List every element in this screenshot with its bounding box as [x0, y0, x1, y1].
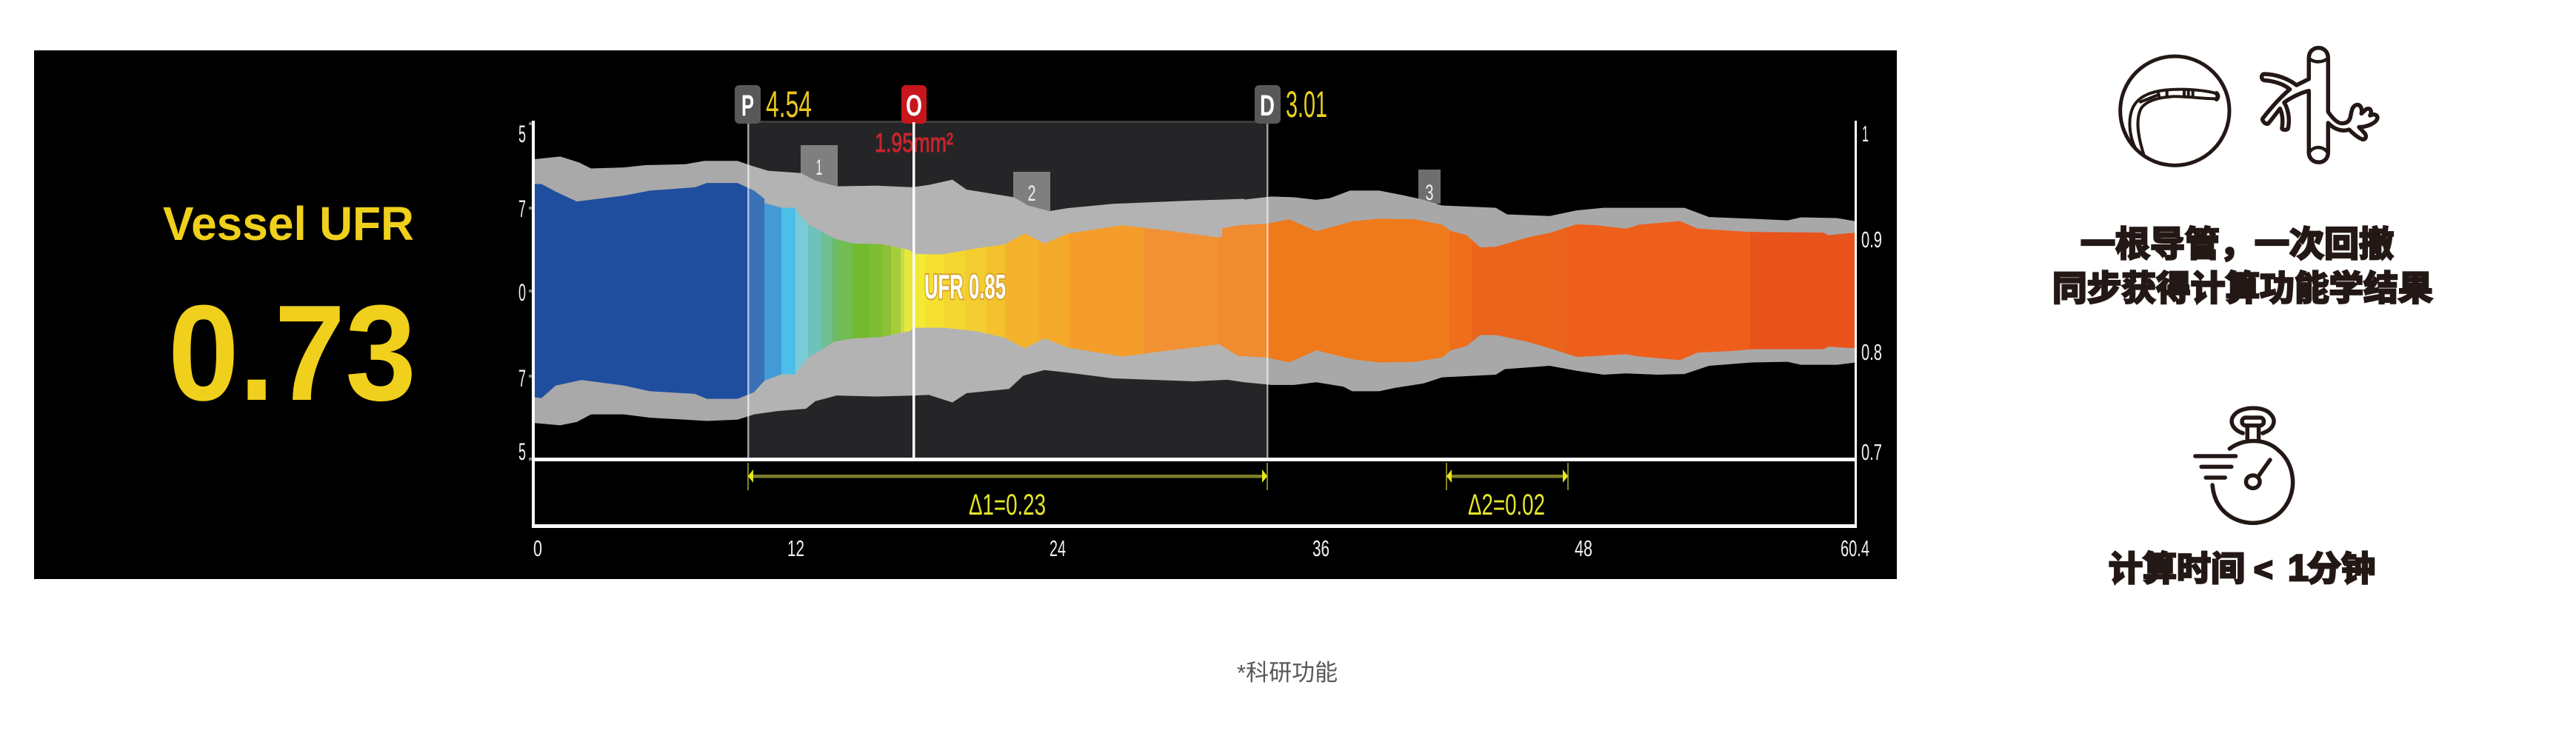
line: P position: [747, 122, 750, 458]
icon: catheter in circle: [2120, 56, 2229, 165]
badge: O: [901, 85, 927, 124]
x axis labels: 24: [1050, 535, 1066, 561]
text: computation time under 1 minute: 分钟: [2307, 549, 2375, 588]
marker: lesion 3: 3: [1425, 181, 1434, 205]
value: 0.73: 0.73: [168, 276, 416, 429]
x axis labels: 0: [533, 535, 542, 561]
footnote: *科研功能: [1237, 660, 1338, 686]
heading: Vessel UFR: Vessel UFR: [163, 197, 414, 250]
text: computation time under 1 minute: 1: [2288, 547, 2309, 589]
badge: P: P: [741, 90, 754, 122]
text: one catheter, one pullback: 一根导管，一次回撤: [2081, 224, 2394, 264]
marker: lesion 2: 2: [1028, 181, 1035, 206]
x axis labels: [533, 535, 1869, 561]
badge: D: [1255, 85, 1281, 124]
right axis labels: 0.9: [1861, 227, 1882, 253]
x axis labels: 48: [1575, 535, 1592, 561]
badge: O: O: [906, 90, 922, 122]
line: O position: [912, 122, 915, 458]
right axis labels: [1861, 121, 1882, 465]
label: delta 2: Δ2=0.02: [1468, 489, 1545, 521]
icon: coronary vessel tree: [2262, 48, 2378, 162]
text: simultaneous functional results: 同步获得计算功能学结果: [2052, 270, 2433, 308]
left axis labels: [518, 121, 532, 465]
left axis labels: 7: [518, 195, 526, 222]
arrow: delta 1 span: [747, 463, 1268, 490]
x axis labels: 12: [787, 535, 804, 561]
left axis labels: 7: [518, 365, 526, 392]
left axis labels: 5: [518, 438, 526, 465]
chart axes frame: [532, 121, 1857, 528]
marker: lesion 2: [1013, 172, 1050, 211]
marker: lesion 1: [801, 145, 838, 187]
badge: P: [735, 85, 761, 124]
shaded P to D segment: [748, 121, 1267, 458]
value: minimum area: 1.95mm²: [875, 127, 953, 158]
left axis labels: 0: [518, 279, 526, 306]
right axis labels: 1: [1862, 121, 1869, 147]
text: computation time under 1 minute: 计算时间: [2109, 549, 2245, 588]
value: P 4.54: 4.54: [766, 84, 812, 125]
marker: lesion 3: [1418, 170, 1441, 205]
lumen colour bands: [535, 183, 1855, 399]
arrow: delta 2 span: [1446, 463, 1569, 490]
text: computation time under 1 minute: <: [2254, 552, 2273, 588]
badge: D: D: [1260, 90, 1275, 122]
x axis labels: 36: [1312, 535, 1329, 561]
line: D position: [1267, 122, 1268, 458]
label: delta 1: Δ1=0.23: [969, 489, 1046, 521]
right axis labels: 0.8: [1861, 339, 1882, 365]
marker: lesion 1: 1: [816, 156, 822, 180]
left axis labels: 5: [518, 121, 526, 147]
icon: stopwatch: [2195, 408, 2293, 523]
label: UFR 0.85: UFR 0.85: [924, 267, 1006, 306]
x axis labels: 60.4: [1841, 535, 1869, 561]
right axis labels: 0.7: [1861, 439, 1882, 465]
panel: black background: [34, 50, 1897, 579]
vessel wall outline: [535, 156, 1855, 425]
chart: vessel lumen profile: [533, 121, 1856, 458]
value: D 3.01: 3.01: [1286, 84, 1327, 125]
